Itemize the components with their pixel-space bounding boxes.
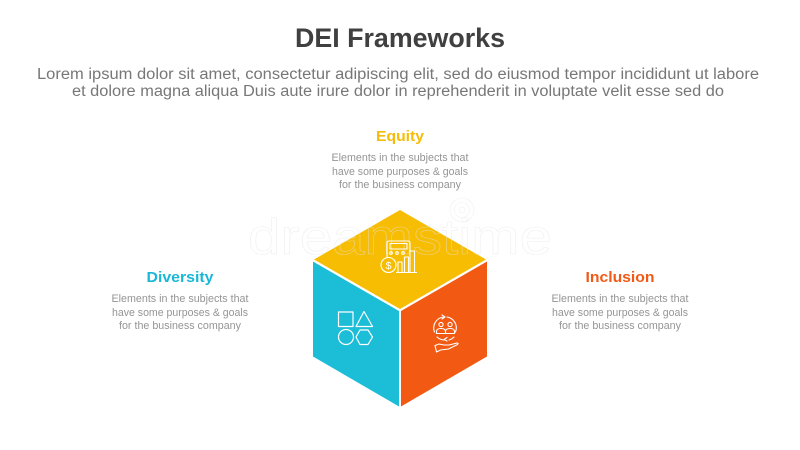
icon: people in cycle over hand (434, 315, 458, 352)
cube diagram (313, 210, 487, 406)
intro text: Lorem ipsum dolor sit amet, consectetur adipiscing elit, sed do eiusmod tempor incididunt ut labore (37, 66, 759, 83)
equity heading: Equity (376, 128, 425, 145)
watermark: dreamstime (248, 209, 552, 265)
intro text: et dolore magna aliqua Duis aute irure dolor in reprehenderit in voluptate velit esse sed do (72, 83, 724, 100)
diversity description: Elements in the subjects that (112, 293, 248, 305)
equity description: have some purposes & goals (332, 166, 468, 178)
inclusion description: for the business company (559, 320, 681, 332)
intro text (37, 66, 759, 100)
cube top face: equity (314, 210, 486, 309)
icon: shapes (338, 312, 372, 344)
equity description: for the business company (339, 179, 461, 191)
inclusion heading: Inclusion (586, 269, 654, 286)
title: DEI Frameworks (295, 23, 505, 53)
diversity description: have some purposes & goals (112, 307, 248, 319)
icon: calculator and chart: $ (386, 260, 392, 272)
inclusion description: Elements in the subjects that (552, 293, 688, 305)
equity description (332, 152, 468, 191)
diversity description (112, 293, 248, 332)
diversity heading: Diversity (146, 269, 214, 286)
diversity description: for the business company (119, 320, 241, 332)
inclusion description: have some purposes & goals (552, 307, 688, 319)
equity description: Elements in the subjects that (332, 152, 468, 164)
cube right face: inclusion (401, 262, 487, 406)
panel: equity text (332, 128, 468, 191)
inclusion description (552, 293, 688, 332)
panel: diversity text (112, 269, 248, 332)
cube left face: diversity (313, 262, 399, 406)
icon: calculator and chart (381, 241, 417, 272)
panel: inclusion text (552, 269, 688, 332)
